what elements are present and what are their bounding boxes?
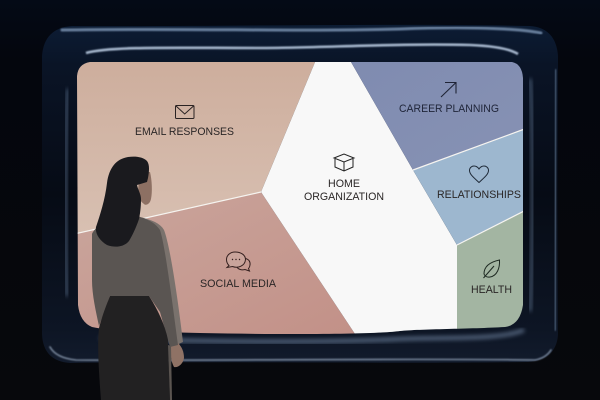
- glass frame: [42, 25, 558, 363]
- top: [92, 205, 178, 347]
- frame upper highlight: [86, 45, 518, 54]
- panel: relationships: [413, 127, 530, 245]
- label: health: [471, 260, 512, 296]
- icon: arrow: [441, 82, 456, 97]
- heading: relationships: RELATIONSHIPS: [437, 189, 521, 201]
- heading: email responses: EMAIL RESPONSES: [135, 126, 234, 138]
- screen panels: [70, 55, 530, 340]
- panel dividers: [70, 127, 530, 245]
- icon: envelope: [176, 106, 194, 118]
- person viewing the screen: [92, 157, 184, 400]
- sleeve highlight: [140, 217, 183, 347]
- icon dots: [232, 259, 240, 260]
- heading: home organization: HOME: [328, 178, 360, 190]
- label: home organization: ORGANIZATION: [304, 191, 384, 203]
- icon: speech bubbles: [226, 252, 250, 271]
- panel: social media: [70, 192, 359, 340]
- label: social media: [200, 252, 277, 290]
- frame highlights: [43, 28, 556, 360]
- skirt edge: [168, 345, 172, 400]
- frame lower highlight: [100, 330, 524, 342]
- heading: career planning: CAREER PLANNING: [399, 103, 499, 115]
- panel: career planning: [351, 62, 523, 170]
- hair: [96, 157, 149, 247]
- panel: home organization: [261, 55, 457, 340]
- icon: leaf: [484, 260, 500, 278]
- panel: health: [457, 212, 523, 329]
- heading: health: HEALTH: [471, 284, 512, 296]
- panel: email responses: [70, 55, 318, 235]
- face: [138, 172, 152, 205]
- label: relationships: [437, 166, 521, 201]
- hand: [170, 343, 184, 367]
- label: home organization: [304, 154, 384, 203]
- label: career planning: [399, 82, 499, 115]
- label: email responses: [135, 106, 234, 138]
- icon: heart: [470, 166, 488, 182]
- icon: box: [334, 154, 354, 171]
- skirt: [98, 296, 170, 400]
- heading: social media: SOCIAL MEDIA: [200, 278, 277, 290]
